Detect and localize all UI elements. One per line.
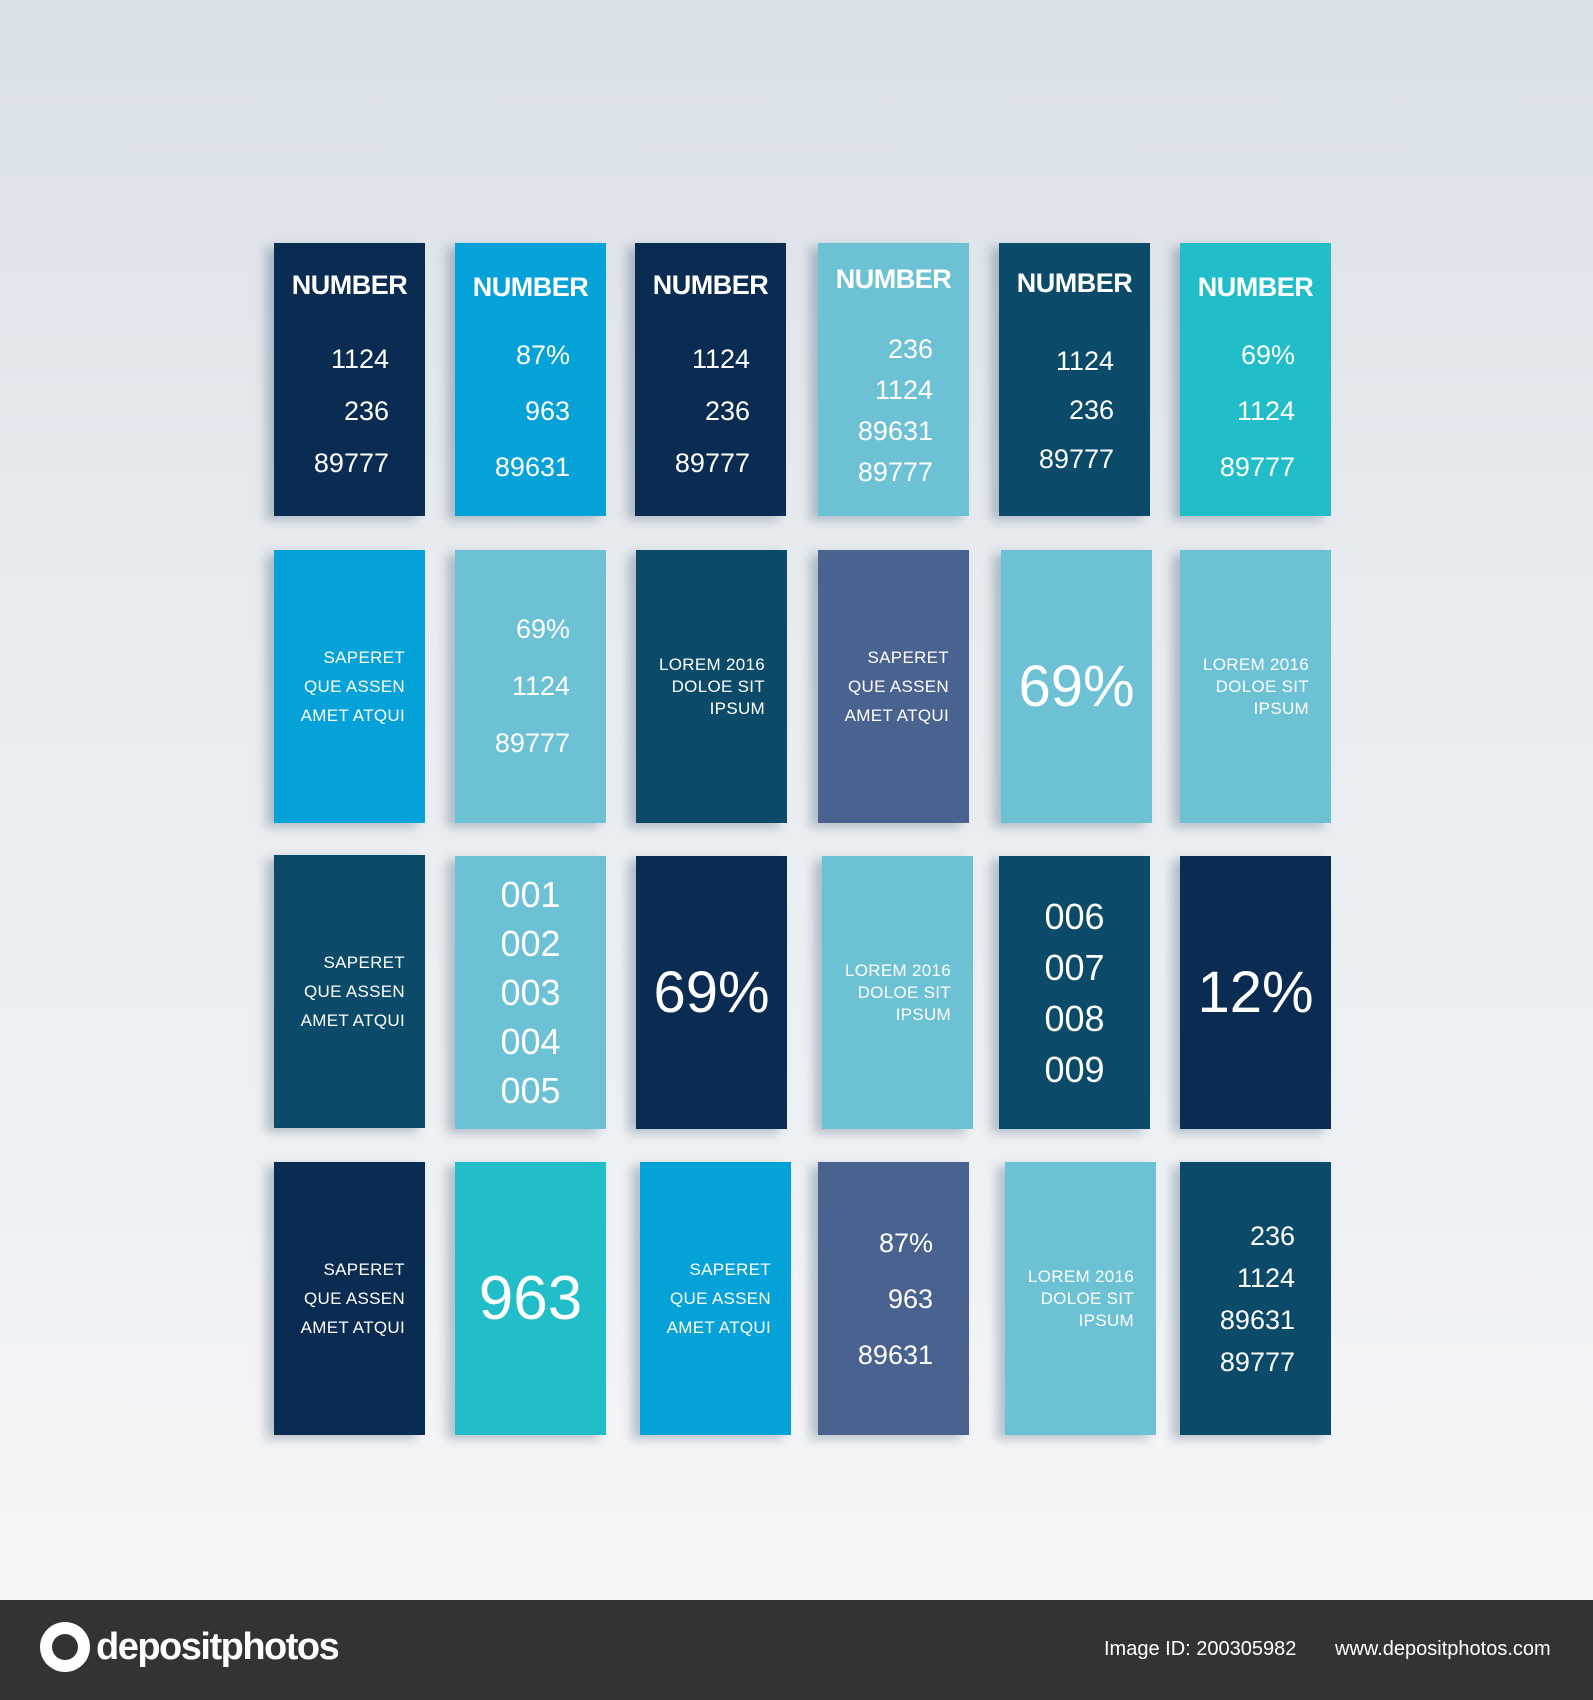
card r1c1 [274, 243, 425, 516]
row 4 [260, 1160, 1331, 1444]
card r4c1: SAPERET [324, 1260, 405, 1279]
card r1c5: 89777 [1039, 444, 1114, 474]
card r1c3 [635, 243, 786, 516]
card r4c6: 236 [1250, 1220, 1295, 1250]
card r4c2: 963 [479, 1264, 582, 1333]
card r1c2: NUMBER [473, 272, 588, 302]
card r1c1: 236 [344, 396, 389, 426]
card r4c3: QUE ASSEN [670, 1289, 771, 1308]
card r4c2 [455, 1162, 606, 1435]
card r2c2: 89777 [495, 728, 570, 758]
card r1c1: NUMBER [292, 270, 407, 300]
card r4c4: 89631 [858, 1340, 933, 1370]
card r3c2 [455, 856, 606, 1129]
website: www.depositphotos.com [1335, 1638, 1551, 1660]
card r1c2 [455, 243, 606, 516]
row 3 [260, 854, 1331, 1138]
footer bar [0, 1600, 1593, 1700]
card r2c5 [1001, 550, 1152, 823]
card r3c6 [1180, 856, 1331, 1129]
card r3c5: 008 [1044, 998, 1105, 1038]
row 1 [260, 242, 1331, 526]
card r4c4 [818, 1162, 969, 1435]
card r3c1: AMET ATQUI [301, 1011, 405, 1030]
card r1c5 [999, 243, 1150, 516]
image id: Image ID: 200305982 [1104, 1638, 1296, 1660]
card r2c3: DOLOE SIT [672, 676, 765, 696]
card r1c2: 89631 [495, 452, 570, 482]
card r3c5: 007 [1044, 946, 1105, 988]
card r1c3: 236 [705, 396, 750, 426]
row 2 [260, 548, 1331, 832]
card r4c3: SAPERET [690, 1260, 771, 1279]
card r1c6: 1124 [1237, 396, 1295, 426]
card r3c2: 001 [500, 874, 561, 915]
card r4c6: 1124 [1237, 1262, 1295, 1292]
card r2c6: DOLOE SIT [1216, 676, 1309, 696]
card r2c4: QUE ASSEN [848, 677, 949, 696]
card r3c1: SAPERET [324, 953, 405, 972]
card r2c2 [455, 550, 606, 823]
card r1c2: 963 [525, 396, 570, 426]
logo [40, 1622, 338, 1672]
card r4c1: AMET ATQUI [301, 1318, 405, 1337]
card r3c4: DOLOE SIT [858, 982, 951, 1002]
card r1c1: 1124 [331, 344, 389, 374]
card r1c3: NUMBER [653, 270, 768, 300]
card r4c6 [1180, 1162, 1331, 1435]
card r4c5: IPSUM [1079, 1310, 1134, 1330]
card r3c6: 12% [1197, 960, 1314, 1025]
card r2c4: SAPERET [868, 648, 949, 667]
card r3c2: 003 [500, 972, 561, 1013]
card r4c4: 87% [879, 1228, 933, 1258]
card r3c2: 005 [500, 1070, 561, 1111]
card r4c4: 963 [888, 1284, 933, 1314]
card r4c6: 89777 [1220, 1346, 1295, 1376]
card r1c4: NUMBER [836, 264, 951, 294]
card r4c6: 89631 [1220, 1304, 1295, 1334]
card r3c3 [636, 856, 787, 1129]
card r3c4: LOREM 2016 [845, 960, 951, 980]
card r1c1: 89777 [314, 448, 389, 478]
card r3c4 [822, 856, 973, 1129]
card r2c1: SAPERET [324, 648, 405, 667]
card r1c4: 1124 [875, 374, 933, 404]
card r1c6: 69% [1241, 340, 1295, 370]
card r3c5: 009 [1044, 1048, 1105, 1090]
card r2c3 [636, 550, 787, 823]
card r3c4: IPSUM [896, 1004, 951, 1024]
card r1c4: 236 [888, 334, 933, 364]
card r4c1 [274, 1162, 425, 1435]
logo: depositphotos [96, 1626, 338, 1668]
card r3c2: 002 [500, 923, 561, 964]
card r4c5: DOLOE SIT [1041, 1288, 1134, 1308]
card r1c6 [1180, 243, 1331, 516]
card r2c4: AMET ATQUI [845, 706, 949, 725]
card r1c5: NUMBER [1017, 268, 1132, 298]
card r2c2: 69% [516, 614, 570, 644]
card r2c6: IPSUM [1254, 698, 1309, 718]
card r2c3: IPSUM [710, 698, 765, 718]
card r1c5: 1124 [1056, 346, 1114, 376]
card r3c2: 004 [500, 1021, 561, 1062]
card r2c3: LOREM 2016 [659, 654, 765, 674]
card r2c1: AMET ATQUI [301, 706, 405, 725]
card r3c5 [999, 856, 1150, 1129]
card r1c3: 89777 [675, 448, 750, 478]
card r3c1: QUE ASSEN [304, 982, 405, 1001]
card r1c3: 1124 [692, 344, 750, 374]
card r2c1 [274, 550, 425, 823]
card r4c5: LOREM 2016 [1028, 1266, 1134, 1286]
card r2c1: QUE ASSEN [304, 677, 405, 696]
card r1c6: NUMBER [1198, 272, 1313, 302]
card r2c5: 69% [1018, 654, 1135, 719]
card r4c3: AMET ATQUI [667, 1318, 771, 1337]
card r1c4 [818, 243, 969, 516]
card r1c4: 89631 [858, 416, 933, 446]
card r1c5: 236 [1069, 395, 1114, 425]
card r2c2: 1124 [512, 671, 570, 701]
card r4c3 [640, 1162, 791, 1435]
card r2c4 [818, 550, 969, 823]
card r3c5: 006 [1044, 896, 1105, 936]
card r2c6 [1180, 550, 1331, 823]
card r1c4: 89777 [858, 456, 933, 486]
card r3c1 [274, 855, 425, 1128]
card r1c6: 89777 [1220, 452, 1295, 482]
card r1c2: 87% [516, 340, 570, 370]
card r3c3: 69% [653, 960, 770, 1025]
card r4c1: QUE ASSEN [304, 1289, 405, 1308]
card r2c6: LOREM 2016 [1203, 654, 1309, 674]
card r4c5 [1005, 1162, 1156, 1435]
